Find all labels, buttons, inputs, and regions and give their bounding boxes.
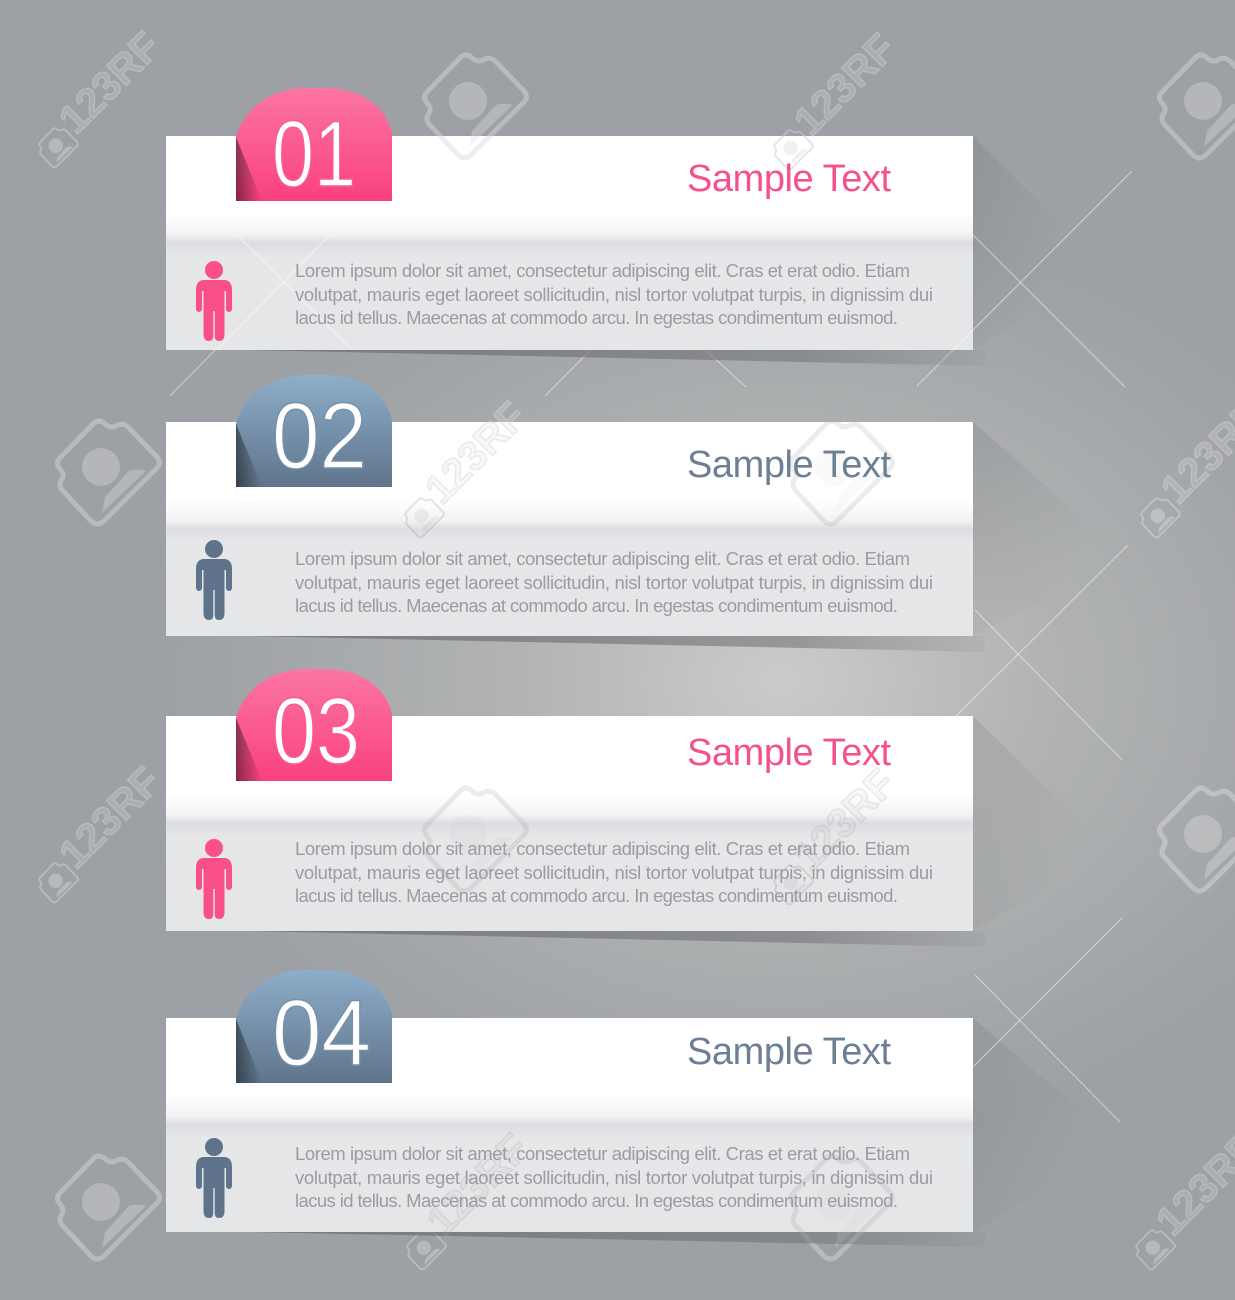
watermark logos on background: 123RF (50, 23, 169, 142)
heading 02: Sample Text (687, 444, 891, 486)
watermark overlay on cards (216, 88, 973, 1232)
text block 03: Lorem ipsum dolor sit amet, consectetur adipiscing elit. Cras et erat odio. Etiam (295, 838, 910, 859)
number tab 03 (236, 669, 392, 783)
text block 02: volutpat, mauris eget laoreet sollicitudin, nisl tortor volutpat turpis, in dignissim dui (295, 572, 933, 593)
text block 04: volutpat, mauris eget laoreet sollicitudin, nisl tortor volutpat turpis, in dignissim dui (295, 1167, 933, 1188)
panel: card 01 (166, 136, 985, 366)
number tab 04 (236, 970, 392, 1085)
watermark logos on background: 123RF (418, 1125, 537, 1244)
text block 03: lacus id tellus. Maecenas at commodo arcu. In egestas condimentum euismod. (295, 885, 898, 906)
watermark overlay on cards: 123RF (418, 1125, 537, 1244)
long shadows to the right of the cards (973, 136, 1090, 1232)
number tab 01 (236, 88, 392, 206)
number tab 02 (236, 375, 392, 488)
heading 03: Sample Text (687, 732, 891, 774)
icon: person 01 (196, 261, 232, 341)
text block 03 (295, 838, 933, 906)
icon: person 04 (196, 1138, 232, 1218)
text block 02: lacus id tellus. Maecenas at commodo arcu. In egestas condimentum euismod. (295, 595, 898, 616)
watermark overlay on cards: 123RF (785, 25, 904, 144)
text block 04 (295, 1143, 933, 1211)
watermark logos on background: 123RF (50, 758, 169, 877)
panel: card 03 (166, 716, 985, 947)
number tab 03: 03 (272, 678, 360, 783)
number tab 04: 04 (272, 980, 371, 1085)
panel: card 02 (166, 422, 985, 652)
number tab 01: 01 (272, 101, 356, 206)
icon: person 03 (196, 839, 232, 919)
heading 04: Sample Text (687, 1031, 891, 1073)
watermark logos on background: 123RF (416, 393, 535, 512)
watermark diagonal lines (170, 171, 1132, 1122)
text block 02: Lorem ipsum dolor sit amet, consectetur adipiscing elit. Cras et erat odio. Etiam (295, 548, 910, 569)
heading 01: Sample Text (687, 158, 891, 200)
watermark overlay on cards: 123RF (785, 760, 904, 879)
panel: card 04 (166, 1018, 985, 1247)
number tab 02: 02 (272, 383, 367, 488)
text block 01: volutpat, mauris eget laoreet sollicitudin, nisl tortor volutpat turpis, in dignissim dui (295, 284, 933, 305)
watermark overlay on cards: 123RF (416, 393, 535, 512)
text block 04: lacus id tellus. Maecenas at commodo arcu. In egestas condimentum euismod. (295, 1190, 898, 1211)
text block 04: Lorem ipsum dolor sit amet, consectetur adipiscing elit. Cras et erat odio. Etiam (295, 1143, 910, 1164)
text block 03: volutpat, mauris eget laoreet sollicitudin, nisl tortor volutpat turpis, in dignissim dui (295, 862, 933, 883)
text block 01 (295, 260, 933, 328)
icon: person 02 (196, 540, 232, 620)
text block 01: lacus id tellus. Maecenas at commodo arcu. In egestas condimentum euismod. (295, 307, 898, 328)
text block 02 (295, 548, 933, 616)
watermark logos on background: 123RF (785, 25, 904, 144)
text block 01: Lorem ipsum dolor sit amet, consectetur adipiscing elit. Cras et erat odio. Etiam (295, 260, 910, 281)
